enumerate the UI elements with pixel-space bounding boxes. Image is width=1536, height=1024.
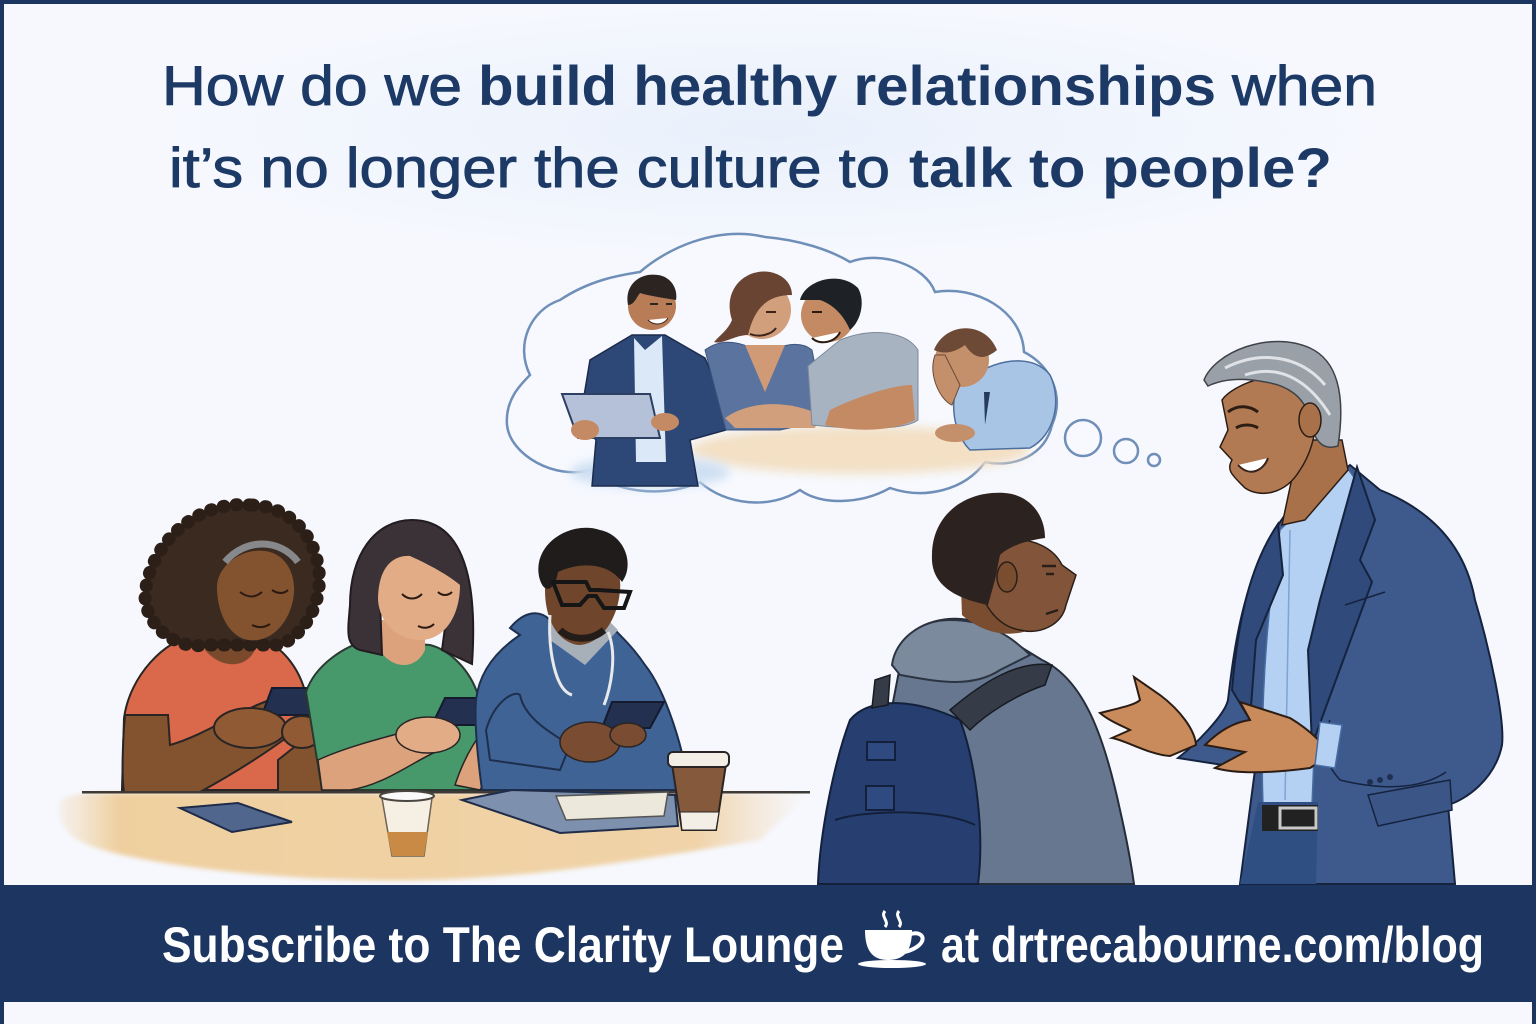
hands — [1100, 677, 1196, 756]
title — [162, 54, 1377, 199]
small woman — [705, 272, 826, 430]
banner text left: Subscribe to The Clarity Lounge — [162, 917, 844, 973]
bubble table wash — [690, 426, 1030, 474]
title: How do we — [162, 54, 462, 117]
jacket — [1178, 465, 1502, 884]
neck — [1282, 440, 1348, 525]
coffee cup — [668, 752, 729, 830]
bubble outline — [507, 234, 1057, 502]
clear cup — [380, 791, 434, 856]
small man laughing — [800, 279, 918, 430]
table with students — [58, 505, 810, 881]
small stressed man — [933, 328, 1056, 450]
tabletop — [58, 793, 810, 881]
thought dots — [1065, 420, 1160, 466]
shirt — [1262, 465, 1356, 806]
title: when — [1231, 54, 1377, 117]
title: build healthy relationships — [478, 54, 1216, 117]
icon: coffee cup — [858, 911, 926, 968]
table edge line — [82, 791, 810, 794]
head — [1220, 377, 1316, 493]
student: man in blue hoodie — [475, 528, 688, 790]
student: woman in green — [306, 520, 500, 790]
lapels — [1308, 467, 1375, 745]
jacket pocket and buttons — [1368, 780, 1452, 826]
small man with tablet — [562, 275, 726, 486]
title: talk to people? — [909, 136, 1332, 199]
jeans and belt — [1240, 802, 1318, 884]
hair — [1204, 341, 1341, 447]
title: it’s no longer the culture to — [169, 136, 890, 199]
student with backpack — [818, 493, 1134, 884]
footer banner — [0, 885, 1536, 1002]
student: girl in orange — [122, 505, 326, 792]
backpack — [818, 664, 1052, 884]
professor in blazer — [1100, 341, 1502, 884]
laptop and papers — [462, 790, 678, 833]
thought bubble — [507, 234, 1160, 502]
phone on table — [180, 803, 292, 832]
